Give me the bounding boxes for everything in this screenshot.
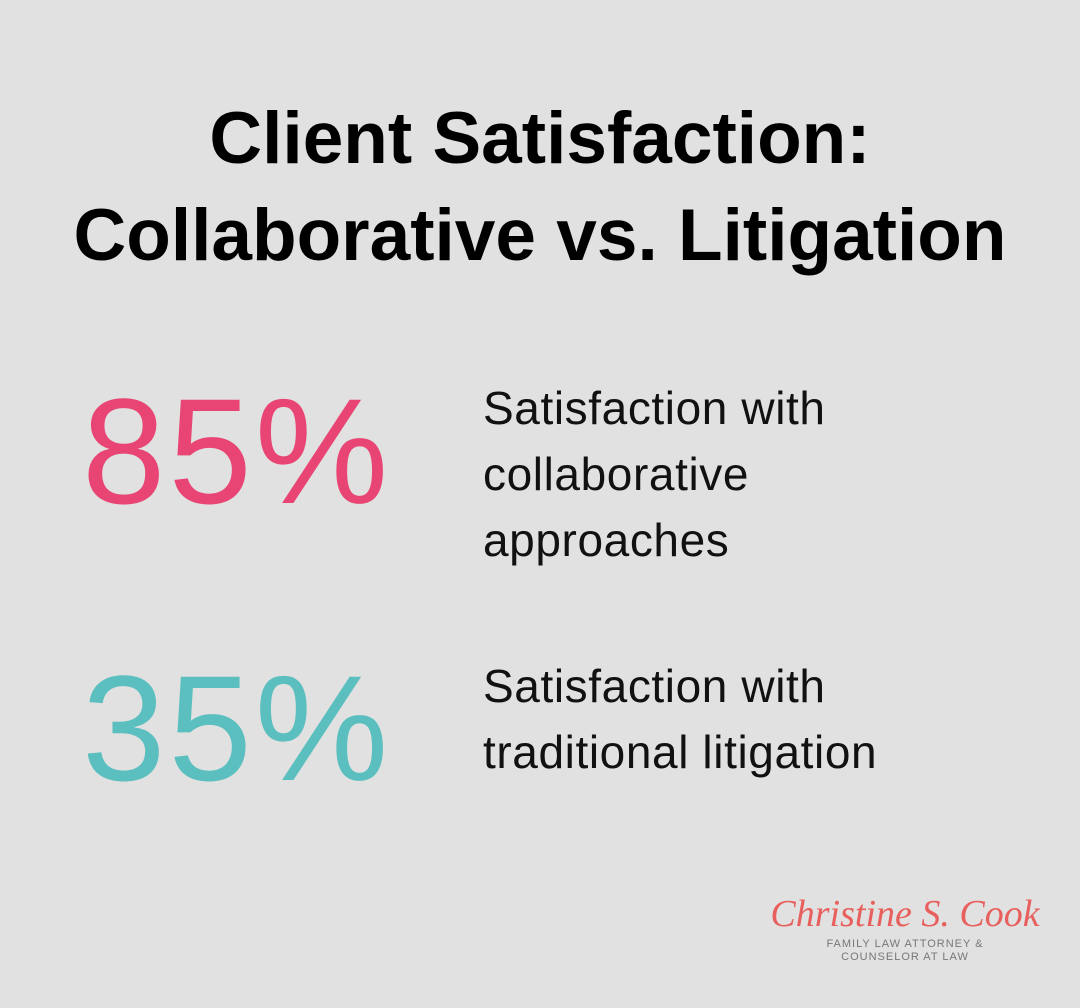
- title: Collaborative vs. Litigation: [74, 195, 1006, 276]
- logo: [770, 893, 1040, 963]
- logo: COUNSELOR AT LAW: [841, 951, 969, 963]
- logo: FAMILY LAW ATTORNEY &: [826, 938, 984, 950]
- title: [74, 98, 1006, 276]
- title: Client Satisfaction:: [209, 98, 871, 179]
- text: collaborative: approaches: [483, 514, 729, 566]
- text: litigation: Satisfaction with: [483, 660, 826, 712]
- text: collaborative: [483, 382, 826, 566]
- text: collaborative: Satisfaction with: [483, 382, 826, 434]
- stat: 85%: 85%: [82, 367, 391, 535]
- stat: 35%: 35%: [82, 644, 391, 812]
- text: litigation: [483, 660, 877, 778]
- text: litigation: traditional litigation: [483, 726, 877, 778]
- logo: Christine S. Cook: [770, 893, 1040, 935]
- text: collaborative: collaborative: [483, 448, 749, 500]
